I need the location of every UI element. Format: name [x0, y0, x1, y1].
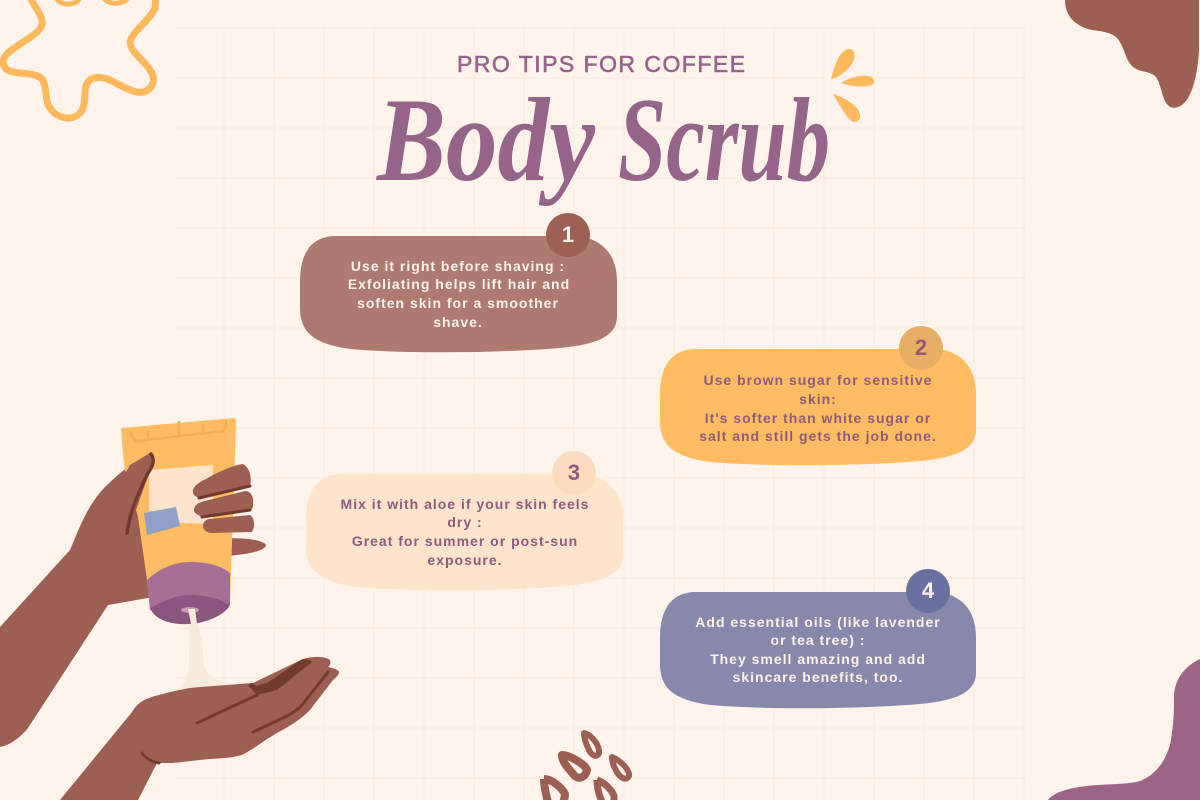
badge 4: 4: [922, 578, 935, 603]
title: Scrub: [618, 73, 830, 206]
card 3: dry :: [447, 514, 483, 530]
decorative star outline top left: [3, 0, 156, 118]
badge 3: [552, 451, 596, 495]
badge 2: [899, 326, 943, 370]
badge 3: 3: [568, 460, 580, 485]
card 2: salt and still gets the job done.: [699, 428, 937, 444]
illustration: hands and tube: [0, 418, 339, 800]
icon: index finger shadow: [248, 659, 312, 695]
card 2: Use brown sugar for sensitive: [704, 372, 932, 388]
icon: fingers: [193, 464, 254, 533]
icon: upper arm and hand: [0, 453, 200, 747]
icon: thumb outline: [127, 454, 153, 533]
card 3: [306, 451, 623, 590]
card 3: Mix it with aloe if your skin feels: [341, 496, 589, 512]
title: Body: [375, 73, 596, 206]
subtitle: PRO TIPS FOR COFFEE: [457, 51, 745, 77]
icon: tube cap: [147, 562, 230, 610]
card 2: It's softer than white sugar or: [705, 410, 931, 426]
card 2: skin:: [799, 391, 837, 407]
badge 4: [906, 569, 950, 613]
icon: lower hand: [60, 657, 339, 800]
icon: yellow splash: [831, 49, 874, 122]
icon: seeds: [544, 733, 629, 800]
blob bottom right: [1048, 659, 1200, 800]
card 1: Exfoliating helps lift hair and: [348, 276, 570, 292]
badge 2: 2: [915, 335, 927, 360]
icon: thumb: [110, 453, 153, 533]
card 1: [300, 213, 617, 352]
badge 1: [546, 213, 590, 257]
card 1: Use it right before shaving :: [351, 258, 565, 274]
card 1: shave.: [433, 314, 483, 330]
icon: blue tag: [144, 507, 180, 535]
card 4: or tea tree) :: [771, 632, 865, 648]
icon: tube label: [149, 465, 213, 524]
badge 1: 1: [562, 222, 574, 247]
icon: finger lines: [199, 486, 250, 517]
card 3: exposure.: [427, 552, 503, 568]
blob top right: [1065, 0, 1199, 108]
icon: tube: [121, 418, 236, 624]
card 4: Add essential oils (like lavender: [695, 614, 941, 630]
card 2: [660, 326, 976, 465]
icon: lower little finger: [225, 538, 266, 556]
card 1: soften skin for a smoother: [357, 295, 559, 311]
title: [375, 73, 830, 206]
card 3: Great for summer or post-sun: [352, 533, 578, 549]
icon: cream drip: [172, 610, 224, 692]
icon: lower hand lines: [142, 672, 328, 763]
card 4: They smell amazing and add: [710, 651, 926, 667]
card 4: skincare benefits, too.: [733, 669, 903, 685]
card 4: [660, 569, 976, 708]
